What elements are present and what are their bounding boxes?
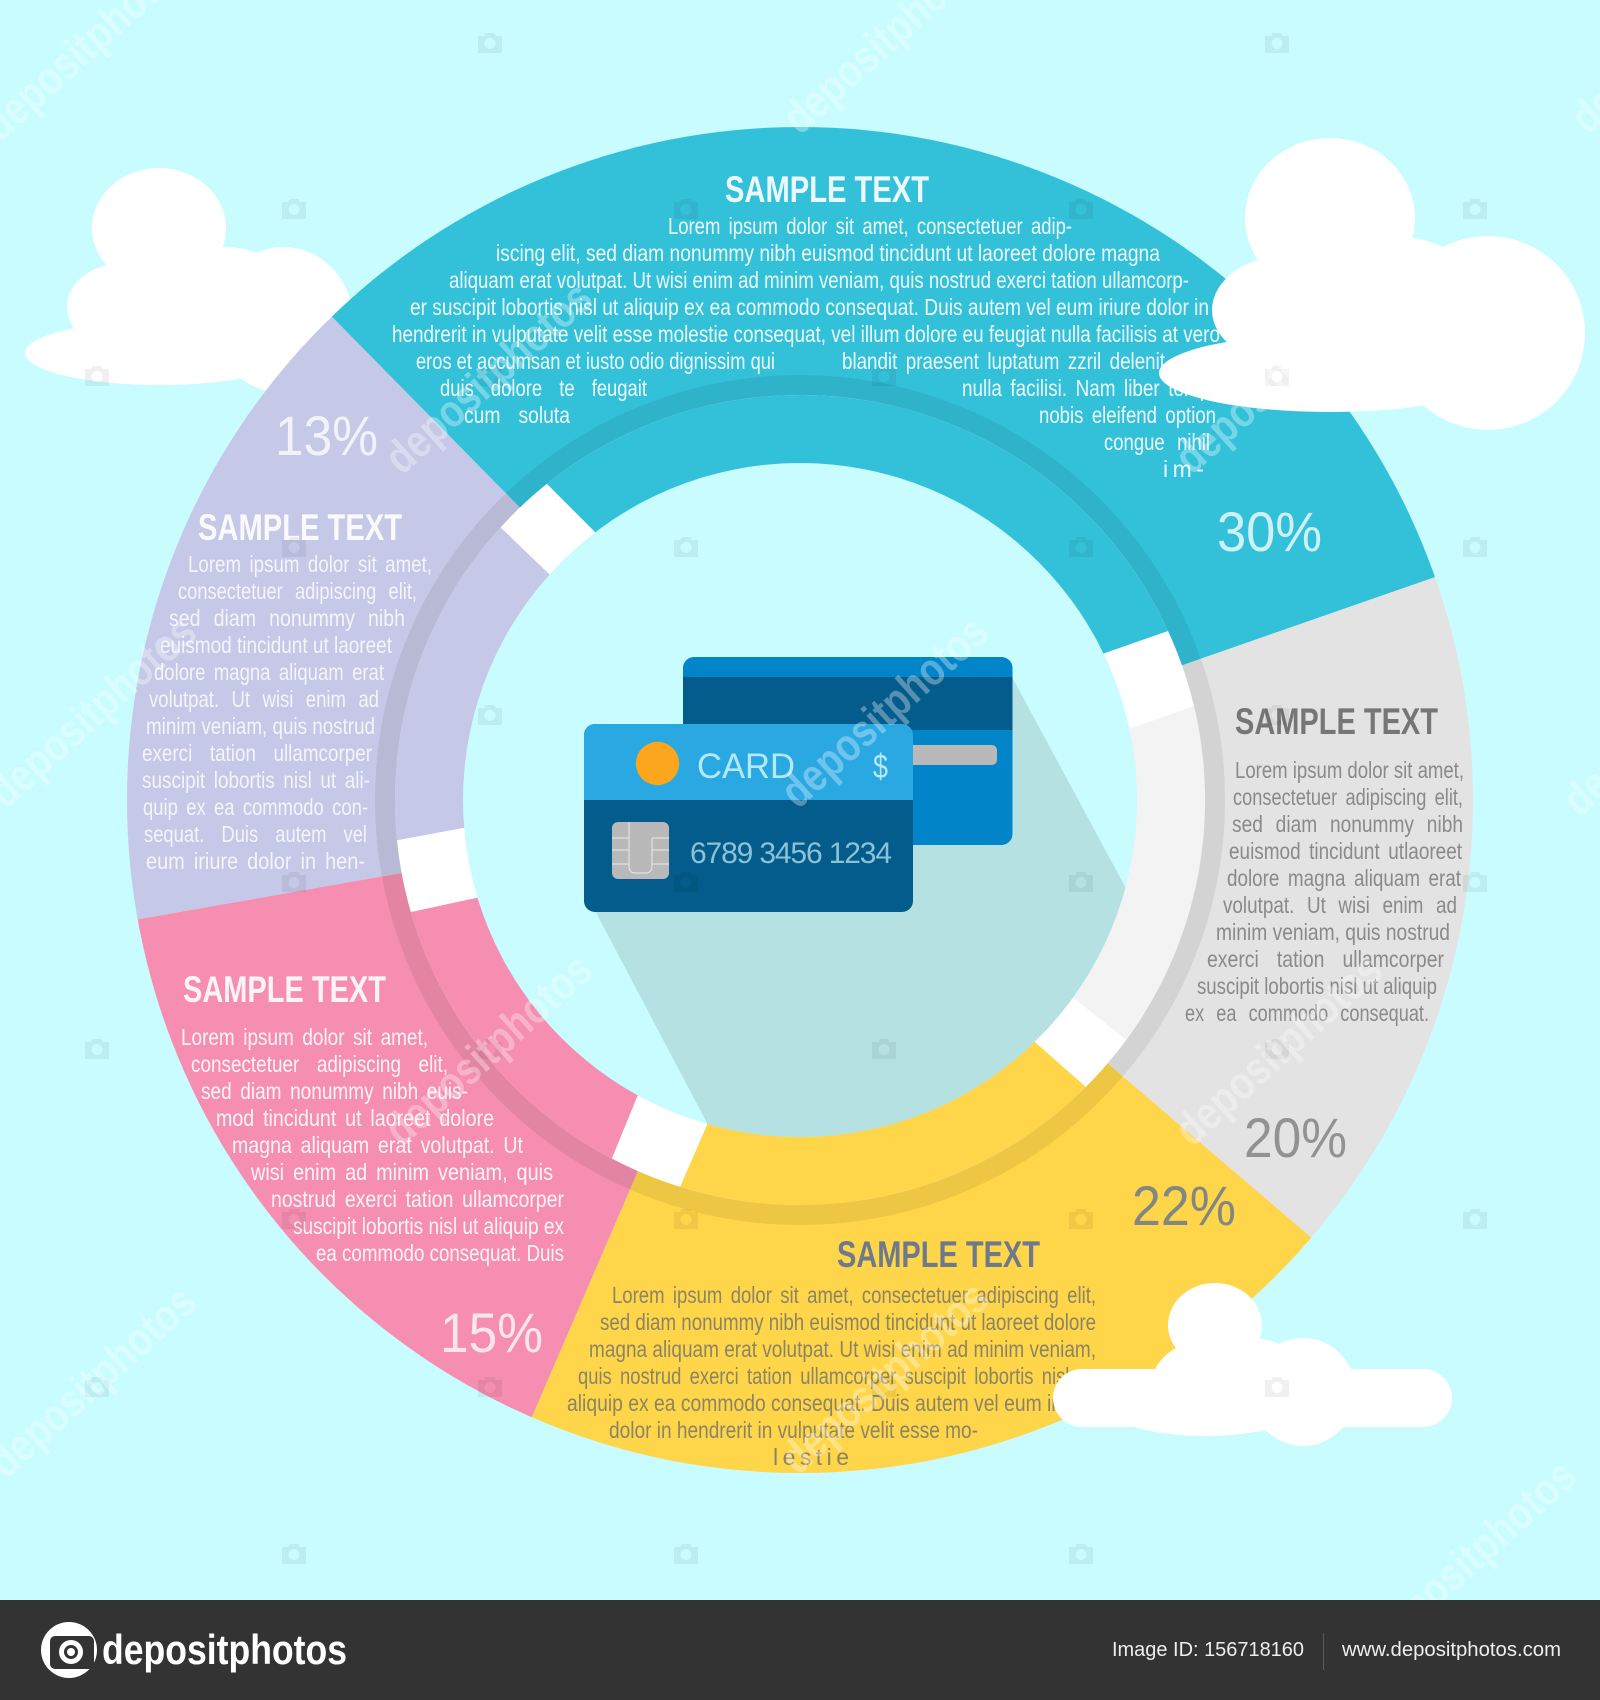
body text: volutpat. Ut wisi enim ad	[149, 686, 379, 712]
body text: ea commodo consequat. Duis	[316, 1240, 564, 1266]
body text: minim veniam, quis nostrud	[146, 713, 375, 739]
inner yellow	[680, 1042, 1086, 1205]
body text: magna aliquam erat volutpat. Ut wisi enim ad minim veniam,	[589, 1336, 1096, 1362]
body text: aliquam erat volutpat. Ut wisi enim ad minim veniam, quis nostrud exerci tation ullamcorp-	[449, 267, 1189, 293]
body text: dolore magna aliquam erat	[1227, 865, 1461, 891]
segment: blue 30%	[332, 127, 1435, 666]
image id: Image ID: 156718160	[1112, 1639, 1304, 1661]
panel: lavender text	[142, 404, 432, 874]
inner grey	[1074, 706, 1205, 1040]
body text: Lorem ipsum dolor sit amet, consectetuer adipiscing elit,	[612, 1282, 1096, 1308]
body text: volutpat. Ut wisi enim ad	[1223, 892, 1457, 918]
inner lavender	[395, 528, 550, 840]
body text: Lorem ipsum dolor sit amet,	[188, 551, 432, 577]
heading: SAMPLE TEXT	[1235, 701, 1438, 742]
body text	[392, 213, 1227, 482]
segment: yellow 22%	[532, 1063, 1312, 1473]
body text: exerci tation ullamcorper	[142, 740, 372, 766]
body text	[181, 1024, 564, 1266]
cloud: top left	[25, 168, 353, 393]
long shadow	[596, 678, 1126, 1137]
panel: pink text	[181, 969, 564, 1364]
body text: wisi enim ad minim veniam, quis	[250, 1159, 553, 1185]
body text: minim veniam, quis nostrud	[1216, 919, 1450, 945]
body text	[567, 1282, 1096, 1470]
cloud: top right	[1159, 138, 1585, 430]
watermarks: depositphotos	[1164, 271, 1392, 483]
chip	[612, 822, 669, 879]
watermark camera icons	[85, 33, 1487, 1564]
body text: i m -	[1163, 456, 1204, 482]
watermarks: depositphotos	[1164, 943, 1392, 1155]
percentage: 30%: 30%	[1217, 500, 1322, 563]
front card	[584, 724, 913, 912]
body text: suscipit lobortis nisl ut ali-	[142, 767, 370, 793]
body text: dolore magna aliquam erat	[154, 659, 384, 685]
outer segments	[127, 127, 1473, 1473]
body text: mod tincidunt ut laoreet dolore	[216, 1105, 494, 1131]
website: www.depositphotos.com	[1341, 1639, 1561, 1661]
watermarks: depositphotos	[374, 271, 602, 483]
footer bar	[0, 1600, 1600, 1700]
body text: consectetuer adipiscing elit,	[178, 578, 417, 604]
segment: grey 20%	[1108, 577, 1473, 1238]
panel: blue text	[392, 169, 1322, 563]
body text: nostrud exerci tation ullamcorper	[271, 1186, 564, 1212]
brand name: depositphotos	[102, 1626, 347, 1673]
body text: Lorem ipsum dolor sit amet,	[181, 1024, 428, 1050]
icon: credit cards	[584, 657, 1012, 912]
body text	[142, 551, 432, 874]
body text: sed diam nonummy nibh euis-	[201, 1078, 468, 1104]
segment: lavender 13%	[127, 316, 520, 920]
watermarks: depositphotos	[770, 1271, 998, 1483]
inner pink	[411, 898, 638, 1158]
panel: grey text	[1185, 701, 1464, 1169]
icon: camera logo	[41, 1622, 97, 1678]
body text: eum iriure dolor in hen-	[146, 848, 365, 874]
body text: hendrerit in vulputate velit esse molestie consequat, vel illum dolore eu feugiat nulla facilisis at vero	[392, 321, 1220, 347]
heading: SAMPLE TEXT	[725, 169, 929, 210]
body text: dolor in hendrerit in vulputate velit esse mo-	[609, 1417, 978, 1443]
orange logo dot	[636, 742, 679, 785]
body text: er suscipit lobortis nisl ut aliquip ex ea commodo consequat. Duis autem vel eum iriure dolor in	[410, 294, 1209, 320]
body text: quip ex ea commodo con-	[143, 794, 368, 820]
percentage: 20%: 20%	[1244, 1106, 1347, 1169]
body text: consectetuer adipiscing elit,	[191, 1051, 448, 1077]
body text: quis nostrud exerci tation ullamcorper suscipit lobortis nisl ut	[578, 1363, 1093, 1389]
body text: congue nihil	[1104, 429, 1210, 455]
card label: CARD	[697, 747, 795, 786]
body text: sed diam nonummy nibh	[169, 605, 405, 631]
inner ring segments with white gaps	[395, 395, 1205, 1205]
body text: suscipit lobortis nisl ut aliquip ex	[293, 1213, 564, 1239]
body text: aliquip ex ea commodo consequat. Duis autem vel eum iriure	[567, 1390, 1090, 1416]
body text: euismod tincidunt utlaoreet	[1229, 838, 1463, 864]
body text: suscipit lobortis nisl ut aliquip	[1197, 973, 1437, 999]
cloud: bottom right	[1053, 1283, 1452, 1446]
body text: Lorem ipsum dolor sit amet, consectetuer adip-	[668, 213, 1072, 239]
body text: sed diam nonummy nibh euismod tincidunt ut laoreet dolore	[600, 1309, 1096, 1335]
body text: Lorem ipsum dolor sit amet,	[1235, 757, 1464, 783]
body text: ex ea commodo consequat.	[1185, 1000, 1429, 1026]
currency sign: $	[873, 748, 888, 786]
body text: iscing elit, sed diam nonummy nibh euismod tincidunt ut laoreet dolore magna	[496, 240, 1160, 266]
body text: consectetuer adipiscing elit,	[1233, 784, 1463, 810]
centre disc	[463, 463, 1137, 1137]
white gaps	[380, 380, 1220, 1220]
body text: magna aliquam erat volutpat. Ut	[232, 1132, 524, 1158]
heading: SAMPLE TEXT	[837, 1234, 1040, 1275]
body text: eros et accumsan et iusto odio dignissim qui	[416, 348, 775, 374]
body text: duis dolore te feugait	[440, 375, 647, 401]
heading: SAMPLE TEXT	[183, 969, 386, 1010]
card number: 6789 3456 1234	[690, 837, 892, 870]
body text: exerci tation ullamcorper	[1207, 946, 1444, 972]
segment: pink 15%	[138, 873, 638, 1418]
body text: sed diam nonummy nibh	[1232, 811, 1463, 837]
percentage: 13%: 13%	[275, 404, 378, 467]
body text: euismod tincidunt ut laoreet	[160, 632, 393, 658]
panel: yellow text	[567, 1174, 1236, 1470]
body text: nulla facilisi. Nam liber tempor	[962, 375, 1227, 401]
body text	[1185, 757, 1464, 1026]
inner blue	[547, 395, 1168, 654]
heading: SAMPLE TEXT	[198, 507, 402, 548]
watermarks: depositphotos	[770, 605, 998, 817]
body text: nobis eleifend option	[1039, 402, 1216, 428]
body text: blandit praesent luptatum zzril delenit	[842, 348, 1165, 374]
back card	[683, 657, 1012, 845]
percentage: 22%: 22%	[1132, 1174, 1236, 1237]
percentage: 15%: 15%	[440, 1301, 543, 1364]
donut chart	[127, 127, 1473, 1473]
body text: cum soluta	[464, 402, 570, 428]
body text: l e s t i e	[773, 1444, 849, 1470]
body text: sequat. Duis autem vel	[144, 821, 367, 847]
watermarks: depositphotos	[374, 943, 602, 1155]
translucent ring	[385, 385, 1215, 1215]
